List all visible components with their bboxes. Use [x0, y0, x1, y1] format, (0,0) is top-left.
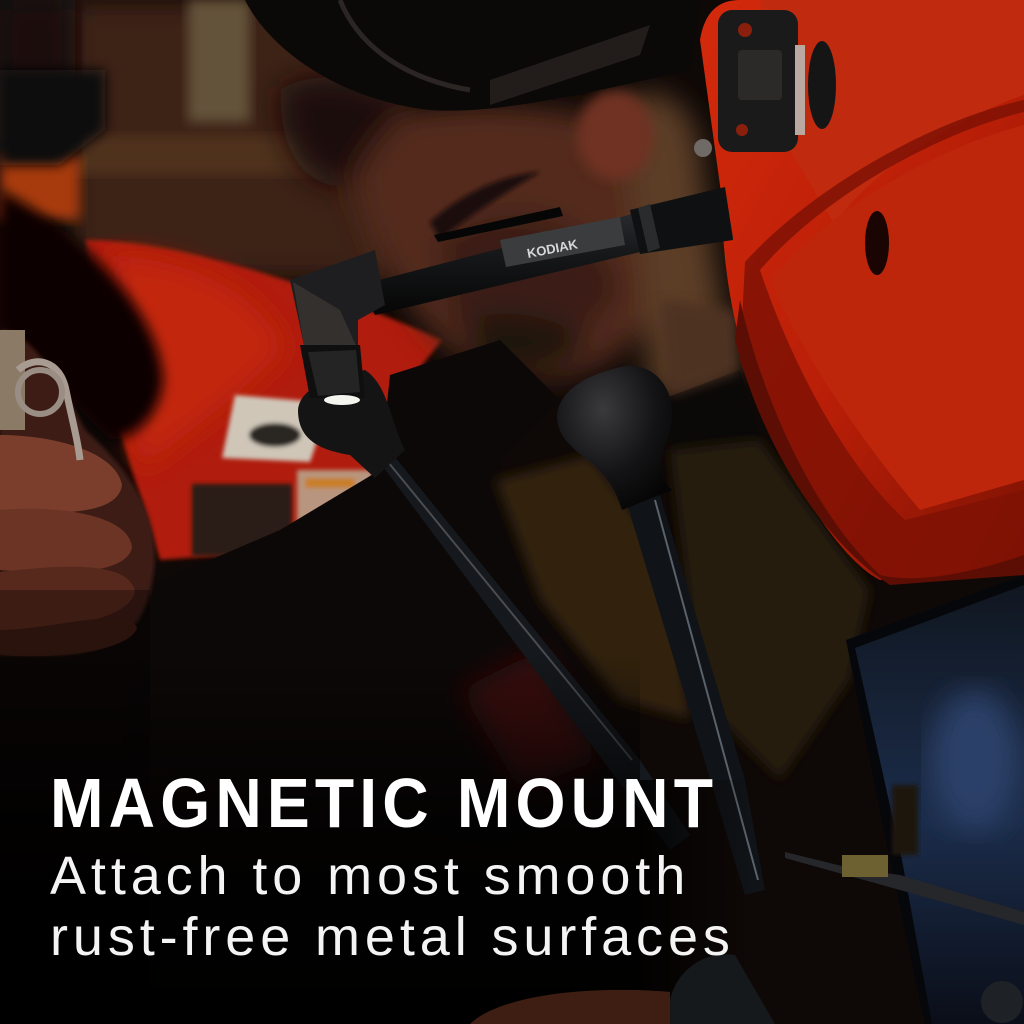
magnetic base [298, 370, 405, 478]
blue metal panel [846, 575, 1024, 1024]
tank labels [192, 395, 372, 556]
ear [577, 90, 653, 180]
flashlight head [300, 345, 365, 398]
pocket clip [434, 207, 563, 242]
left shift rod [378, 457, 690, 850]
dark gradient tapering to the right of the text [640, 780, 750, 1024]
subheading: Attach to most smooth [50, 846, 690, 906]
threaded bolt [785, 852, 1024, 925]
right shift knob and rod [557, 366, 765, 895]
dark bottom gradient behind text [0, 650, 640, 1024]
red tank on left [85, 240, 442, 560]
subheading [50, 846, 735, 967]
red machine body on right [700, 0, 1024, 585]
flashlight logo plate: KODIAK [526, 236, 580, 261]
dark gradient over the lower hand [0, 590, 150, 1024]
flashlight LED [324, 395, 360, 405]
dark shape top left [0, 70, 163, 440]
flashlight barrel [360, 188, 733, 315]
hand with ring tool [0, 330, 155, 656]
eye and brow [430, 172, 540, 240]
rubber latch on red machine [694, 10, 836, 157]
subheading: rust-free metal surfaces [50, 907, 735, 967]
flashlight logo plate [500, 217, 625, 267]
bottom engine parts [470, 954, 775, 1024]
mechanic jacket [120, 300, 870, 850]
mechanic face [280, 77, 730, 400]
magnetic flashlight [290, 187, 733, 405]
welding helmet strap [245, 0, 700, 111]
heading: MAGNETIC MOUNT [50, 764, 718, 842]
flashlight elbow [290, 250, 385, 350]
